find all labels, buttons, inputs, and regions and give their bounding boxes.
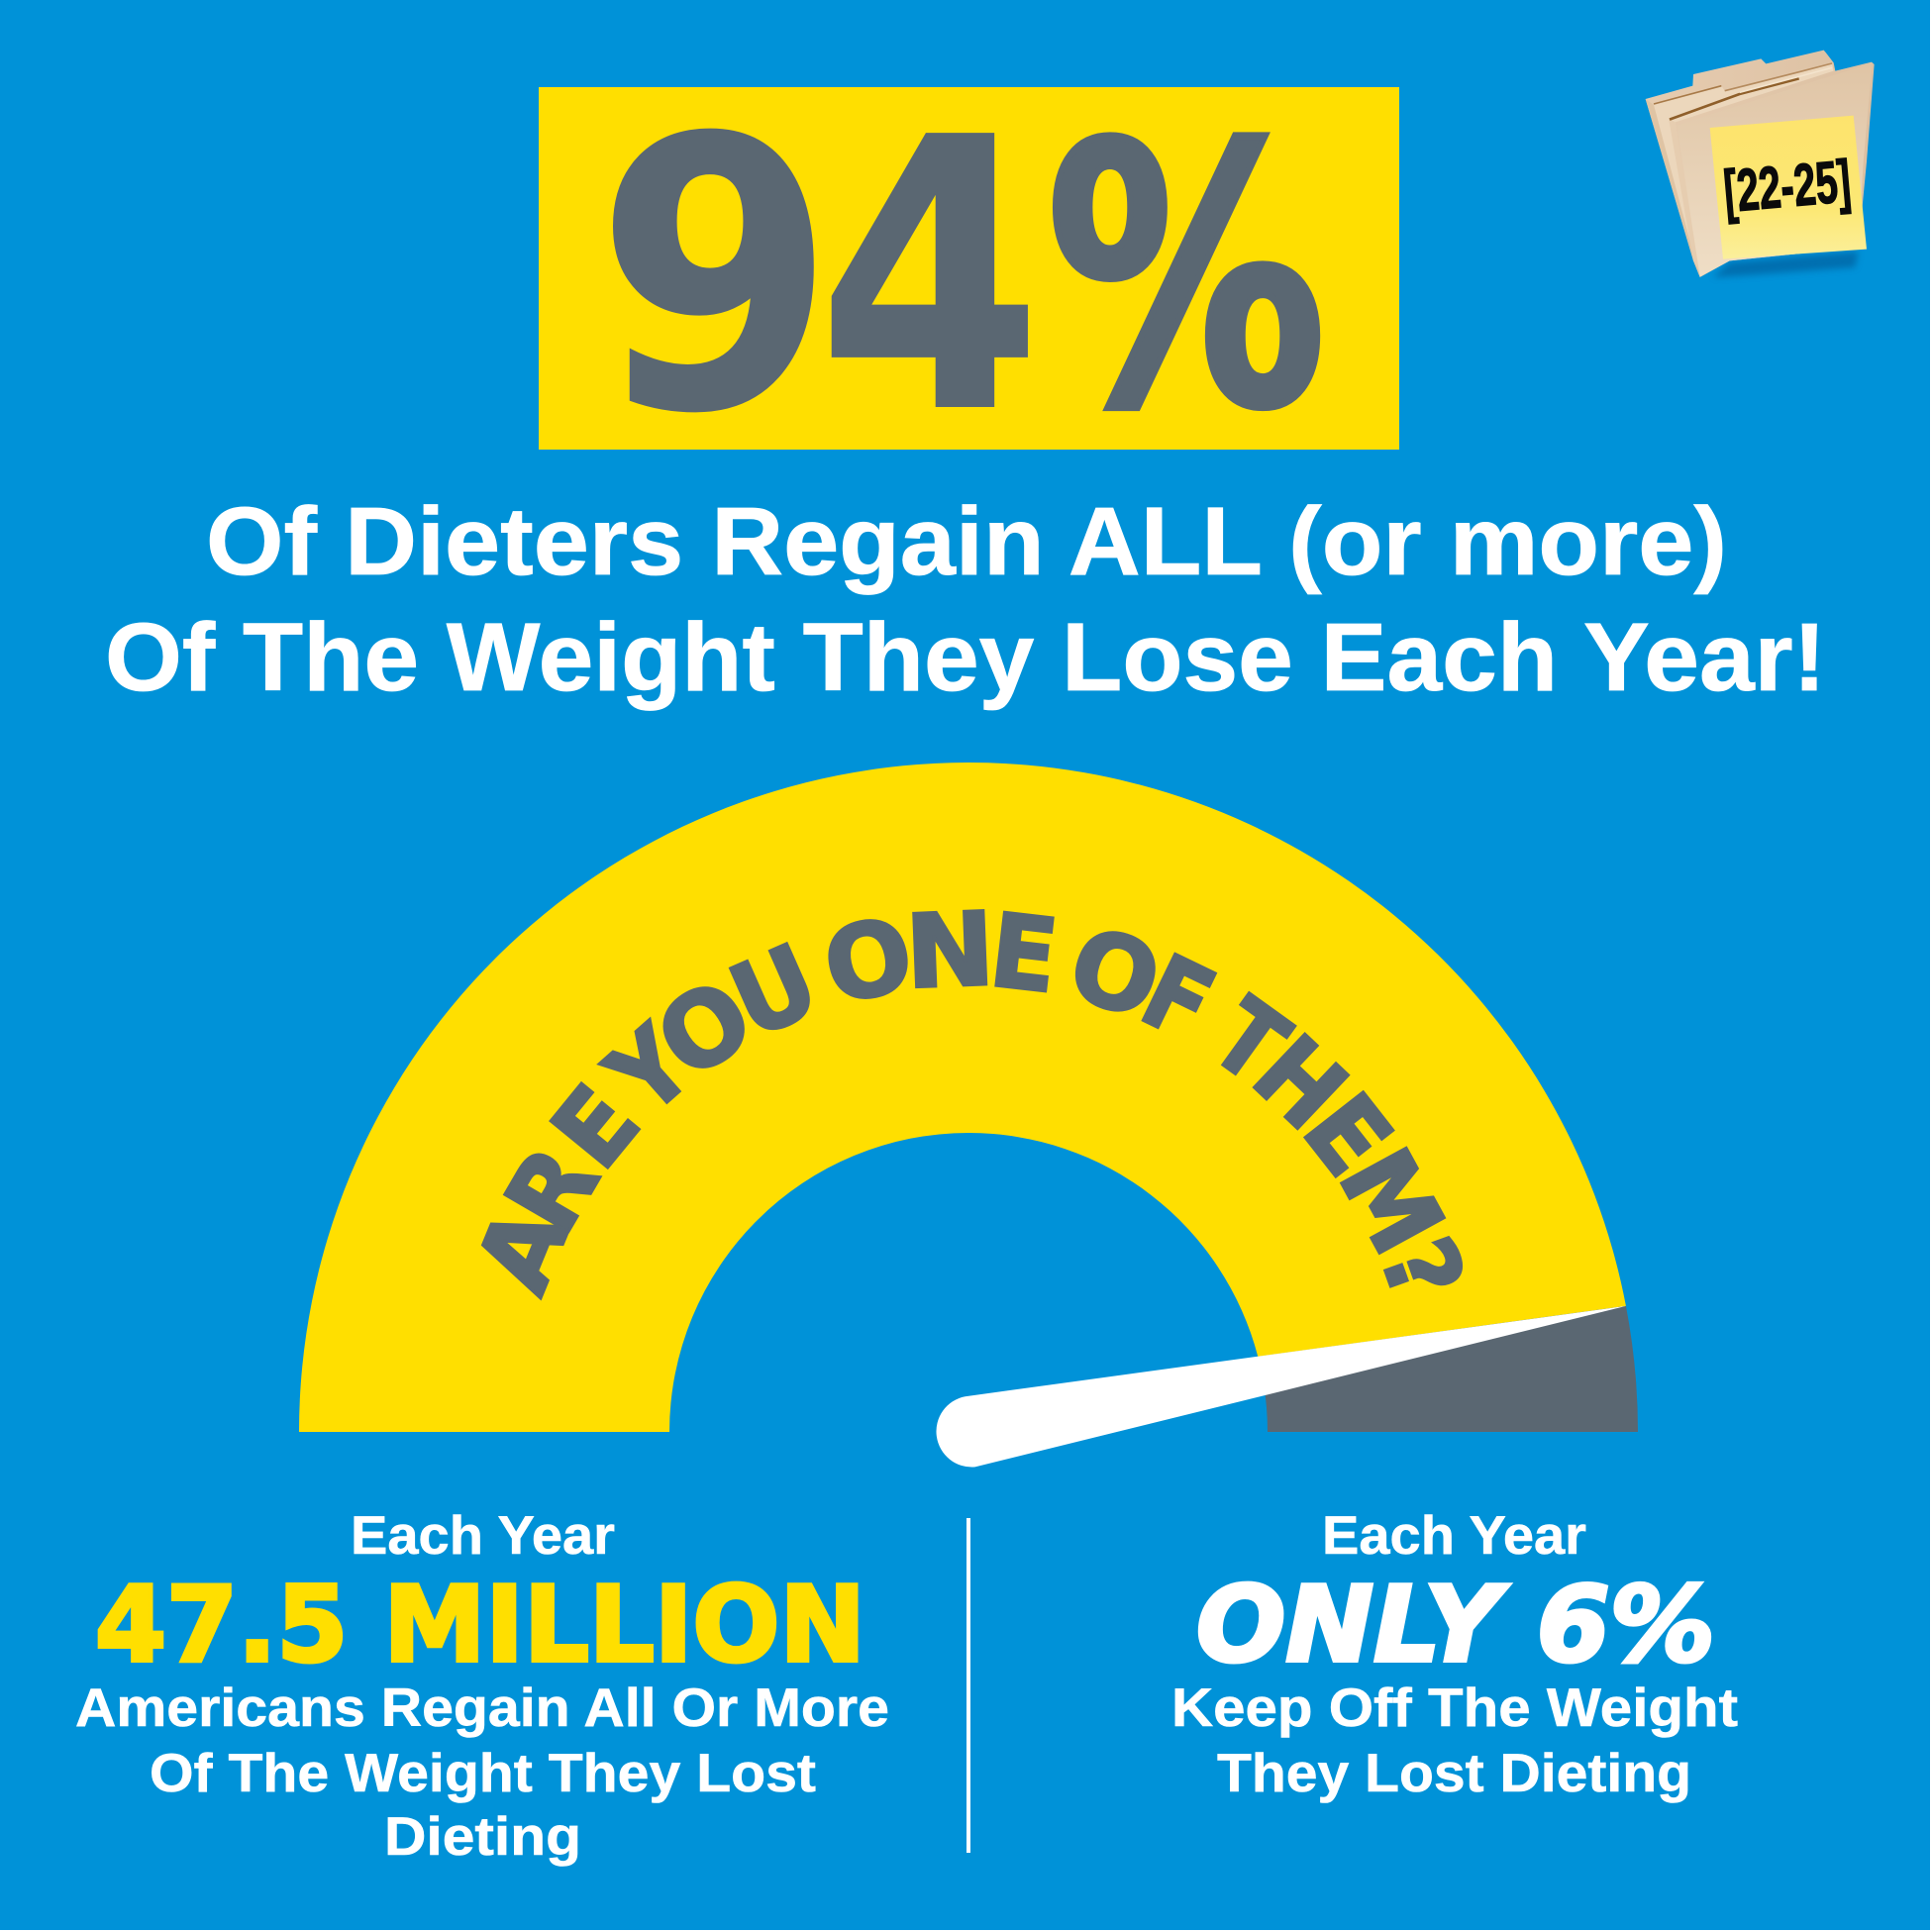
- label: each year: Each Year: [1322, 1504, 1586, 1566]
- label: each year: Each Year: [351, 1504, 615, 1566]
- curved text: ARE YOU ONE OF THEM?: F: [1125, 933, 1231, 1065]
- heading: Of Dieters Regain ALL (or more): [206, 487, 1727, 595]
- curved text: ARE YOU ONE OF THEM?: U: [714, 922, 835, 1062]
- heading: [105, 487, 1826, 711]
- panel: left statistic: [75, 1504, 889, 1867]
- curved text: ARE YOU ONE OF THEM?: T: [1191, 977, 1306, 1106]
- panel: yellow 94% banner: [539, 59, 1399, 494]
- sticky note: [1710, 116, 1867, 259]
- curved text: ARE YOU ONE OF THEM?: N: [903, 890, 996, 1011]
- gauge needle: [936, 1306, 1626, 1468]
- description text: They Lost Dieting: [1217, 1742, 1691, 1803]
- curved text: ARE YOU ONE OF THEM?: E: [984, 893, 1063, 1016]
- curved text: ARE YOU ONE OF THEM?: E: [1280, 1073, 1413, 1197]
- curved text: ARE YOU ONE OF THEM?: [455, 890, 1485, 1316]
- big statistic 94%: [596, 59, 1326, 494]
- stat: only 6%: ONLY 6%: [1196, 1565, 1715, 1685]
- curved text: ARE YOU ONE OF THEM?: R: [484, 1129, 622, 1252]
- curved text: ARE YOU ONE OF THEM?: O: [814, 895, 923, 1028]
- description text: Of The Weight They Lost: [150, 1742, 816, 1803]
- stat: 47.5 million: 47.5 MILLION: [95, 1565, 865, 1685]
- curved text: ARE YOU ONE OF THEM?: ?: [1357, 1224, 1485, 1316]
- curved text: ARE YOU ONE OF THEM?: Y: [586, 1004, 715, 1137]
- curved text: ARE YOU ONE OF THEM?: O: [637, 957, 773, 1102]
- description text: Keep Off The Weight: [1171, 1677, 1738, 1738]
- gauge yellow segment: [299, 763, 1626, 1432]
- description text: [1171, 1677, 1738, 1803]
- description text: Dieting: [384, 1805, 581, 1867]
- heading: Of The Weight They Lose Each Year!: [105, 603, 1826, 711]
- big statistic 94%: 9: [596, 59, 835, 494]
- curved text: ARE YOU ONE OF THEM?: A: [455, 1191, 593, 1308]
- curved text: ARE YOU ONE OF THEM?: O: [1056, 905, 1173, 1043]
- note label [22-25]: [22-25]: [1721, 148, 1854, 225]
- curved text: ARE YOU ONE OF THEM?: M: [1316, 1131, 1466, 1272]
- description text: [75, 1677, 889, 1867]
- big statistic 94%: 4: [818, 59, 1042, 494]
- panel: right statistic: [1171, 1504, 1738, 1803]
- description text: Americans Regain All Or More: [75, 1677, 889, 1738]
- curved text: ARE YOU ONE OF THEM?: H: [1232, 1013, 1369, 1152]
- gauge chart: [299, 763, 1638, 1468]
- icon: manila folders with sticky note: [1646, 51, 1875, 277]
- big statistic 94%: %: [1047, 70, 1326, 487]
- gauge gray segment: [1258, 1306, 1638, 1432]
- curved text: ARE YOU ONE OF THEM?: E: [531, 1066, 662, 1190]
